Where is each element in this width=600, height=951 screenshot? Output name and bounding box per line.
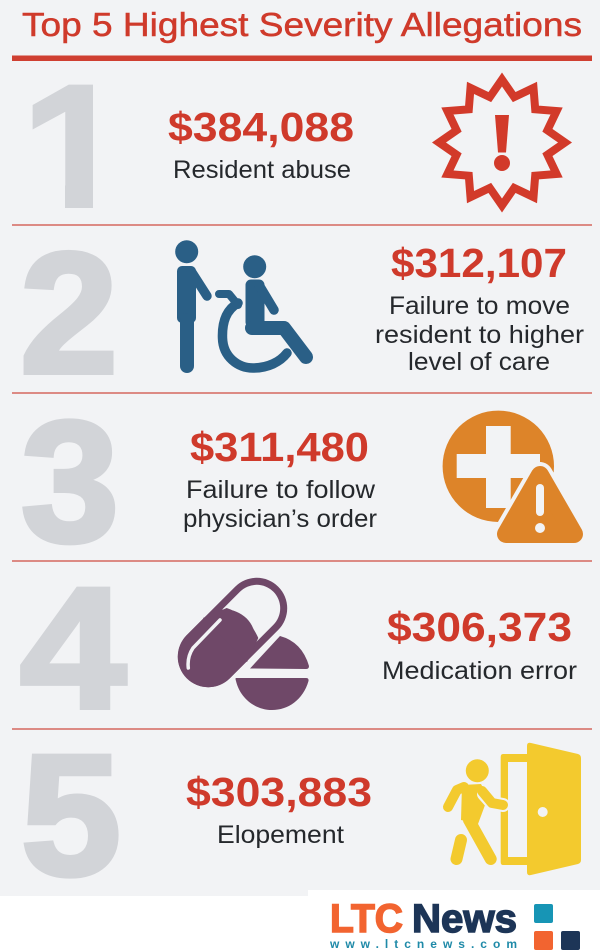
- rank number 5: 5: [21, 720, 121, 912]
- label 1: Resident abuse: [173, 156, 351, 184]
- rank number 2: 2: [20, 218, 118, 410]
- label 2: resident to higher: [375, 321, 584, 349]
- label 3: [183, 476, 377, 533]
- footer: white logo band: [308, 890, 600, 951]
- rank number 4: 4: [20, 552, 126, 744]
- amount 5: $303,883: [186, 769, 372, 815]
- panel: rank 4 medication error: [20, 552, 577, 744]
- title: Top 5 Highest Severity Allegations: [22, 6, 582, 43]
- amount 2: $312,107: [391, 240, 567, 286]
- icon: caregiver and wheelchair: [175, 240, 306, 368]
- logo url: www.ltcnews.com: [329, 937, 517, 951]
- panel: rank 5 elopement: [21, 720, 581, 912]
- amount 4: $306,373: [387, 604, 572, 650]
- label 3: Failure to follow: [186, 476, 376, 504]
- logo wordmark: [330, 897, 517, 941]
- logo squares: [534, 904, 580, 950]
- logo: LTC News: [329, 897, 580, 951]
- icon: starburst alert: [439, 80, 565, 206]
- icon: pills: [188, 608, 309, 710]
- logo wordmark: LTC: [330, 897, 403, 941]
- panel: rank 1 resident abuse: [32, 72, 572, 212]
- label 2: level of care: [408, 348, 550, 376]
- icon: person leaving through door: [448, 743, 581, 875]
- amount 1: $384,088: [168, 104, 354, 150]
- label 2: [375, 292, 584, 376]
- label 4: Medication error: [382, 657, 577, 685]
- amount 3: $311,480: [190, 424, 369, 470]
- icon: medical cross and warning: [443, 411, 574, 534]
- rank number 1: 1: [22, 50, 132, 242]
- label 5: Elopement: [217, 821, 344, 849]
- rank number 3: 3: [21, 386, 119, 578]
- panel: rank 2 failure to move resident: [20, 218, 584, 410]
- logo wordmark: News: [412, 897, 517, 941]
- label 2: Failure to move: [389, 292, 570, 320]
- panel: rank 3 failure to follow physician's order: [21, 386, 574, 578]
- label 3: physician’s order: [183, 505, 377, 533]
